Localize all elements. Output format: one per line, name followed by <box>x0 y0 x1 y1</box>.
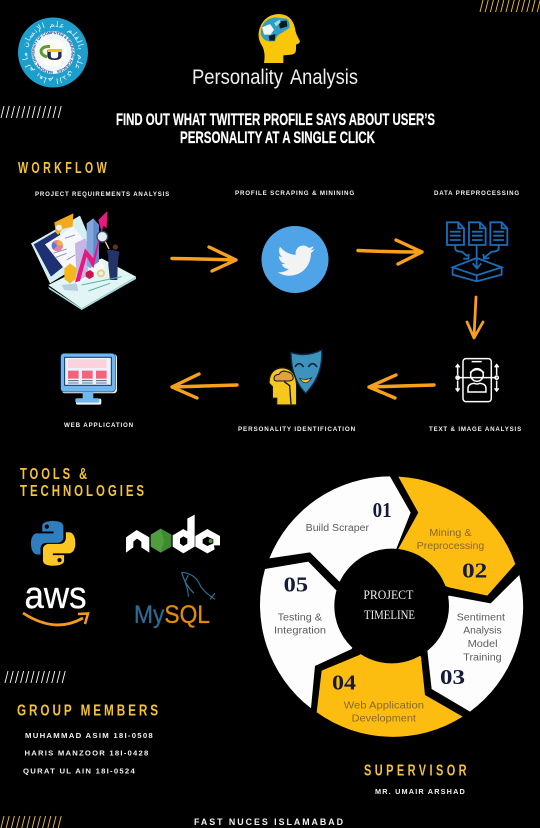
step label: text and image: TEXT & IMAGE ANALYSIS <box>429 427 522 433</box>
member names <box>23 731 154 776</box>
icon: node logo <box>126 515 221 553</box>
icon: data preprocessing <box>447 222 507 281</box>
icon: laptop analytics <box>31 211 136 310</box>
heading: tools and technologies <box>20 466 147 500</box>
icon: twitter <box>262 226 328 293</box>
icon: aws logo: aws <box>24 575 86 617</box>
logo: university seal: U <box>46 47 63 64</box>
icon: python <box>31 521 75 566</box>
label 04: Development <box>352 714 416 725</box>
logo: university seal: NATIONAL UNIVERSITY OF COMPUTER & EMERGING SCIENCES <box>32 31 74 74</box>
step label: personality identification: PERSONALITY IDENTIFICATION <box>238 427 356 433</box>
step label: web application: WEB APPLICATION <box>64 423 134 429</box>
label 03 <box>457 612 505 663</box>
title <box>192 66 358 89</box>
segment 03 <box>423 575 523 712</box>
label 03: Sentiment <box>457 612 505 623</box>
arrow: step 4 to 5 <box>369 375 434 398</box>
label 05: Testing & <box>278 612 322 623</box>
number 02: 02 <box>462 558 487 582</box>
step label: scraping: PROFILE SCRAPING & MININING <box>235 191 355 197</box>
heading: group members: GROUP MEMBERS <box>17 702 161 720</box>
icon: mysql logo <box>134 572 215 629</box>
label 03: Training <box>463 652 502 663</box>
icon: head with puzzle <box>259 14 300 63</box>
segment 02 <box>398 477 515 596</box>
arrow: step 2 to 3 <box>358 240 422 264</box>
member names: HARIS MANZOOR 18I-0428 <box>24 748 150 758</box>
number 03: 03 <box>440 665 465 689</box>
heading: PERSONALITY AT A SINGLE CLICK <box>180 129 375 147</box>
heading: tools and technologies: TECHNOLOGIES <box>20 483 147 500</box>
title: Analysis <box>290 66 358 89</box>
label 04: Web Application <box>344 700 424 711</box>
step label: requirements: PROJECT REQUIREMENTS ANALYSIS <box>35 192 170 198</box>
heading: supervisor: SUPERVISOR <box>364 762 470 780</box>
step label: preprocessing: DATA PREPROCESSING <box>434 191 520 197</box>
chart: project timeline wheel <box>260 476 523 737</box>
segment 01 <box>269 476 411 582</box>
number 04: 04 <box>332 670 356 694</box>
logo: university seal: الذي علم بالقلم علم الإنسان ما لم يعلم <box>22 21 84 84</box>
arrow: step 3 to 4 <box>467 297 483 338</box>
center label: PROJECT <box>363 588 414 602</box>
number 01: 01 <box>373 498 392 522</box>
title: Personality <box>192 66 283 89</box>
icon: monitor <box>61 353 117 405</box>
member names: QURAT UL AIN 18I-0524 <box>23 766 136 776</box>
heading <box>116 111 435 147</box>
heading: tools and technologies: TOOLS & <box>20 466 90 483</box>
segment 05 <box>260 562 367 708</box>
segment 04 <box>317 632 463 737</box>
label 01: Build Scraper <box>306 523 370 534</box>
supervisor name: MR. UMAIR ARSHAD <box>375 787 466 796</box>
heading: workflow: WORKFLOW <box>18 160 110 177</box>
footer: FAST NUCES ISLAMABAD <box>194 817 345 827</box>
center label <box>363 588 415 622</box>
icon: face scan phone <box>456 359 499 402</box>
center label: TIMELINE <box>364 608 415 622</box>
label 04 <box>344 700 424 725</box>
center hub <box>334 549 449 663</box>
label 03: Model <box>468 639 498 650</box>
arrow: step 5 to 6 <box>172 374 237 398</box>
label 02: Mining & <box>429 528 472 539</box>
number 05: 05 <box>284 572 308 596</box>
icon: mask and head <box>269 350 322 405</box>
label 02 <box>417 528 484 552</box>
label 02: Preprocessing <box>417 541 484 552</box>
label 05 <box>274 612 326 637</box>
member names: MUHAMMAD ASIM 18I-0508 <box>25 731 154 740</box>
arrow: step 1 to 2 <box>172 247 236 271</box>
label 05: Integration <box>274 626 326 637</box>
icon: mysql logo: MySQL <box>134 601 210 629</box>
label 03: Analysis <box>463 626 502 637</box>
